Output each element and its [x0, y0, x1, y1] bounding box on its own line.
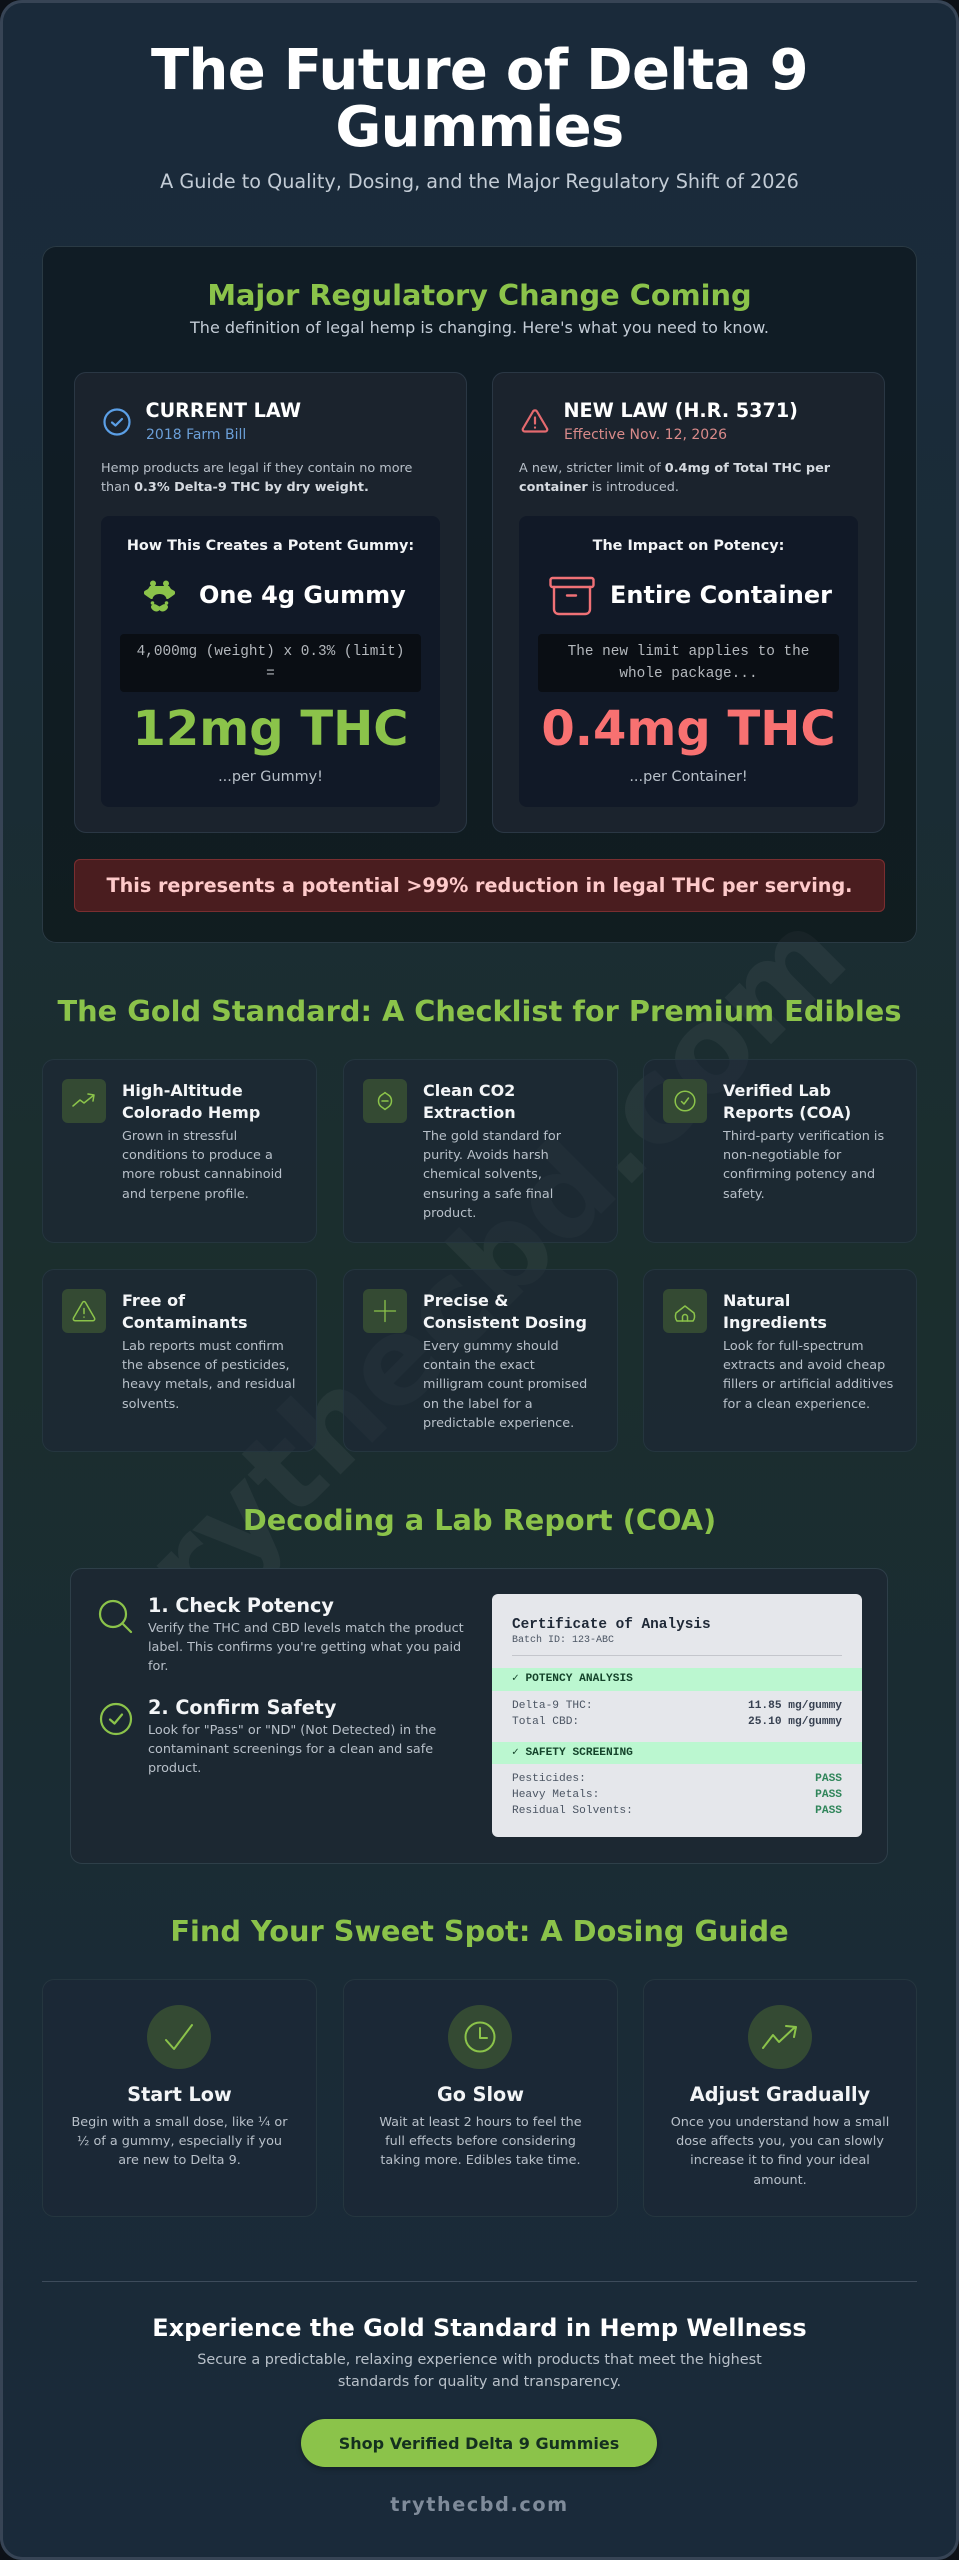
- panel: lab report guide: [70, 1568, 888, 1864]
- card: high altitude hemp: [42, 1059, 317, 1243]
- card text: solvents.: [122, 1397, 179, 1412]
- panel: major regulatory change: [42, 246, 917, 943]
- card title: Natural: [723, 1291, 790, 1310]
- step 2 text: contaminant screenings for a clean and safe: [148, 1742, 433, 1757]
- card text: Look for full-spectrum: [723, 1339, 864, 1354]
- footer brand: trythecbd.com: [390, 2493, 569, 2516]
- title: [151, 38, 808, 160]
- potency labels: Total CBD:: [512, 1716, 579, 1728]
- icon: container: [549, 576, 595, 616]
- per container note: ...per Container!: [629, 769, 748, 785]
- current law description: Hemp products are legal if they contain no more: [101, 461, 412, 476]
- card text: milligram count promised: [423, 1377, 587, 1392]
- potency band: ✓ POTENCY ANALYSIS: [512, 1673, 633, 1685]
- heading: gold standard checklist: The Gold Standard: A Checklist for Premium Edibles: [58, 994, 901, 1028]
- call to action text: standards for quality and transparency.: [338, 2374, 621, 2390]
- card title: Ingredients: [723, 1313, 827, 1332]
- card title: Consistent Dosing: [423, 1313, 587, 1332]
- card text: full effects before considering: [385, 2134, 576, 2149]
- icon: check circle: [103, 408, 131, 436]
- card text: contain the exact: [423, 1358, 535, 1373]
- card text: heavy metals, and residual: [122, 1377, 295, 1392]
- potency labels: Delta-9 THC:: [512, 1700, 593, 1712]
- card title: Reports (COA): [723, 1103, 851, 1122]
- gummy label: One 4g Gummy: [199, 581, 406, 609]
- card: verified lab reports: [643, 1059, 917, 1243]
- card text: conditions to produce a: [122, 1148, 273, 1163]
- card title: [723, 1291, 827, 1332]
- card text: [723, 1339, 893, 1412]
- card text: Begin with a small dose, like ¼ or: [72, 2115, 288, 2130]
- card title: Verified Lab: [723, 1081, 831, 1100]
- button: shop gummies: [301, 2419, 657, 2467]
- icon: check circle: [100, 1702, 132, 1736]
- step 1 text: Verify the THC and CBD levels match the product: [148, 1621, 464, 1636]
- text: panel intro: The definition of legal hemp is changing. Here's what you need to know.: [190, 318, 769, 337]
- title: The Future of Delta 9: [151, 38, 808, 102]
- card text: increase it to find your ideal: [690, 2153, 870, 2168]
- card text: Wait at least 2 hours to feel the: [379, 2115, 582, 2130]
- heading: dosing guide: Find Your Sweet Spot: A Dosing Guide: [170, 1914, 789, 1948]
- card title: Free of: [122, 1291, 185, 1310]
- potency values: [748, 1700, 842, 1728]
- card text: chemical solvents,: [423, 1167, 542, 1182]
- card: clean co2 extraction: [343, 1059, 618, 1243]
- card text: Third-party verification is: [723, 1129, 884, 1144]
- card text: [671, 2115, 889, 2188]
- safety labels: Residual Solvents:: [512, 1805, 633, 1817]
- card title: [723, 1081, 851, 1122]
- step 2 text: [148, 1723, 436, 1776]
- step 2 heading: 2. Confirm Safety: [148, 1696, 336, 1719]
- card text: [423, 1339, 587, 1431]
- safety labels: Pesticides:: [512, 1773, 586, 1785]
- card text: ½ of a gummy, especially if you: [77, 2134, 282, 2149]
- card text: The gold standard for: [423, 1129, 561, 1144]
- limit explanation: The new limit applies to the: [568, 644, 809, 660]
- card text: confirming potency and: [723, 1167, 875, 1182]
- step 1 text: for.: [148, 1659, 168, 1674]
- card title: High-Altitude: [122, 1081, 243, 1100]
- card: start low: [42, 1979, 317, 2217]
- card text: [422, 1129, 561, 1221]
- card text: [122, 1129, 282, 1202]
- impact heading: The Impact on Potency:: [593, 538, 784, 554]
- icon: house: [663, 1289, 707, 1333]
- formula: [120, 634, 421, 692]
- potency labels: [512, 1700, 593, 1728]
- call to action heading: Experience the Gold Standard in Hemp Wellness: [152, 2314, 807, 2342]
- current law description: [101, 461, 412, 495]
- panel: current law: [74, 372, 467, 833]
- new law description: A new, stricter limit of 0.4mg of Total THC per: [519, 461, 830, 476]
- potency values: 25.10 mg/gummy: [748, 1716, 842, 1728]
- card text: are new to Delta 9.: [118, 2153, 241, 2168]
- card title: Extraction: [423, 1103, 516, 1122]
- heading: decoding a lab report: Decoding a Lab Report (COA): [243, 1503, 716, 1537]
- safety values: PASS: [815, 1773, 842, 1785]
- card text: ensuring a safe final: [423, 1187, 553, 1202]
- card: go slow: [343, 1979, 618, 2217]
- card title: Start Low: [127, 2083, 232, 2106]
- potency band: [492, 1668, 862, 1691]
- icon: check: [147, 2005, 211, 2069]
- card: free of contaminants: [42, 1269, 317, 1452]
- safety labels: Heavy Metals:: [512, 1789, 599, 1801]
- card text: Lab reports must confirm: [122, 1339, 284, 1354]
- safety band: ✓ SAFETY SCREENING: [512, 1747, 633, 1759]
- card text: extracts and avoid cheap: [723, 1358, 885, 1373]
- title: Gummies: [335, 95, 624, 160]
- icon: gummy: [144, 580, 175, 612]
- card text: on the label for a: [423, 1397, 533, 1412]
- per gummy note: ...per Gummy!: [218, 769, 323, 785]
- icon: verified check: [663, 1079, 707, 1123]
- card text: more robust cannabinoid: [122, 1167, 282, 1182]
- card text: product.: [423, 1206, 476, 1221]
- card title: [423, 1081, 516, 1122]
- card text: [379, 2115, 582, 2168]
- step 1 heading: 1. Check Potency: [148, 1594, 334, 1617]
- safety band: [492, 1742, 862, 1764]
- new law description: container is introduced.: [519, 480, 679, 495]
- card text: fillers or artificial additives: [723, 1377, 893, 1392]
- calculation heading: How This Creates a Potent Gummy:: [127, 538, 414, 554]
- card title: Precise &: [423, 1291, 508, 1310]
- card text: non-negotiable for: [723, 1148, 841, 1163]
- result: 0.4mg THC: 0.4mg THC: [541, 701, 836, 757]
- icon: lemon minus: [363, 1079, 407, 1123]
- card title: Go Slow: [437, 2083, 524, 2106]
- potency values: 11.85 mg/gummy: [748, 1700, 842, 1712]
- batch id: Batch ID: 123-ABC: [512, 1635, 614, 1646]
- card text: purity. Avoids harsh: [423, 1148, 549, 1163]
- call to action text: Secure a predictable, relaxing experience with products that meet the highest: [197, 2352, 762, 2368]
- formula: =: [266, 666, 275, 682]
- current law subheading: 2018 Farm Bill: [146, 427, 246, 443]
- safety labels: [512, 1773, 633, 1817]
- new law heading: NEW LAW (H.R. 5371): [564, 399, 798, 422]
- card title: Adjust Gradually: [690, 2083, 870, 2106]
- card title: Contaminants: [122, 1313, 247, 1332]
- icon: trending up: [748, 2005, 812, 2069]
- result: 12mg THC: 12mg THC: [132, 701, 409, 757]
- formula: 4,000mg (weight) x 0.3% (limit): [137, 644, 404, 660]
- card title: Colorado Hemp: [122, 1103, 260, 1122]
- limit explanation: whole package...: [619, 666, 758, 682]
- card title: Clean CO2: [423, 1081, 515, 1100]
- watermark: trythecbd.com: [77, 885, 873, 1680]
- subtitle: A Guide to Quality, Dosing, and the Major Regulatory Shift of 2026: [160, 170, 799, 193]
- card text: the absence of pesticides,: [122, 1358, 290, 1373]
- safety values: PASS: [815, 1805, 842, 1817]
- card text: safety.: [723, 1187, 765, 1202]
- safety values: PASS: [815, 1789, 842, 1801]
- panel: potent gummy calculation: [101, 516, 440, 807]
- card title: [122, 1081, 260, 1122]
- card text: for a clean experience.: [723, 1397, 870, 1412]
- card text: [122, 1339, 295, 1412]
- card title: [423, 1291, 587, 1332]
- step 2 text: product.: [148, 1761, 201, 1776]
- button: shop gummies: Shop Verified Delta 9 Gummies: [339, 2434, 619, 2453]
- card text: Once you understand how a small: [671, 2115, 889, 2130]
- card text: [722, 1129, 884, 1202]
- certificate of analysis document: [492, 1594, 862, 1837]
- card title: [122, 1291, 247, 1332]
- new law subheading: Effective Nov. 12, 2026: [564, 427, 727, 443]
- icon: warning triangle: [522, 409, 548, 433]
- card: precise dosing: [343, 1269, 618, 1452]
- panel: potency impact: [519, 516, 858, 807]
- callout: thc reduction: [74, 859, 885, 912]
- card: adjust gradually: [643, 1979, 917, 2217]
- icon: clock: [448, 2005, 512, 2069]
- step 2 text: Look for "Pass" or "ND" (Not Detected) in the: [148, 1723, 436, 1738]
- limit explanation: [538, 634, 839, 692]
- callout: thc reduction: This represents a potential >99% reduction in legal THC per serving.: [107, 874, 852, 897]
- panel: new law: [492, 372, 885, 833]
- card text: taking more. Edibles take time.: [380, 2153, 581, 2168]
- icon: magnifier: [98, 1600, 132, 1634]
- container label: Entire Container: [610, 581, 832, 609]
- step 1 text: label. This confirms you're getting what you paid: [148, 1640, 461, 1655]
- step 1 text: [148, 1621, 464, 1674]
- call to action text: [197, 2352, 762, 2390]
- card text: and terpene profile.: [122, 1187, 249, 1202]
- card text: Every gummy should: [423, 1339, 559, 1354]
- current law description: than 0.3% Delta-9 THC by dry weight.: [101, 480, 369, 495]
- new law description: [519, 461, 830, 495]
- card: natural ingredients: [643, 1269, 917, 1452]
- current law heading: CURRENT LAW: [146, 399, 301, 422]
- card text: Grown in stressful: [122, 1129, 237, 1144]
- card text: dose affects you, you can slowly: [676, 2134, 884, 2149]
- icon: trending up: [62, 1079, 106, 1123]
- card text: [72, 2115, 288, 2168]
- card text: amount.: [753, 2173, 807, 2188]
- heading: major regulatory change: Major Regulatory Change Coming: [207, 278, 752, 312]
- card text: predictable experience.: [423, 1416, 574, 1431]
- certificate title: Certificate of Analysis: [512, 1617, 711, 1633]
- safety values: [815, 1773, 842, 1817]
- icon: warning: [62, 1289, 106, 1333]
- icon: plus: [363, 1289, 407, 1333]
